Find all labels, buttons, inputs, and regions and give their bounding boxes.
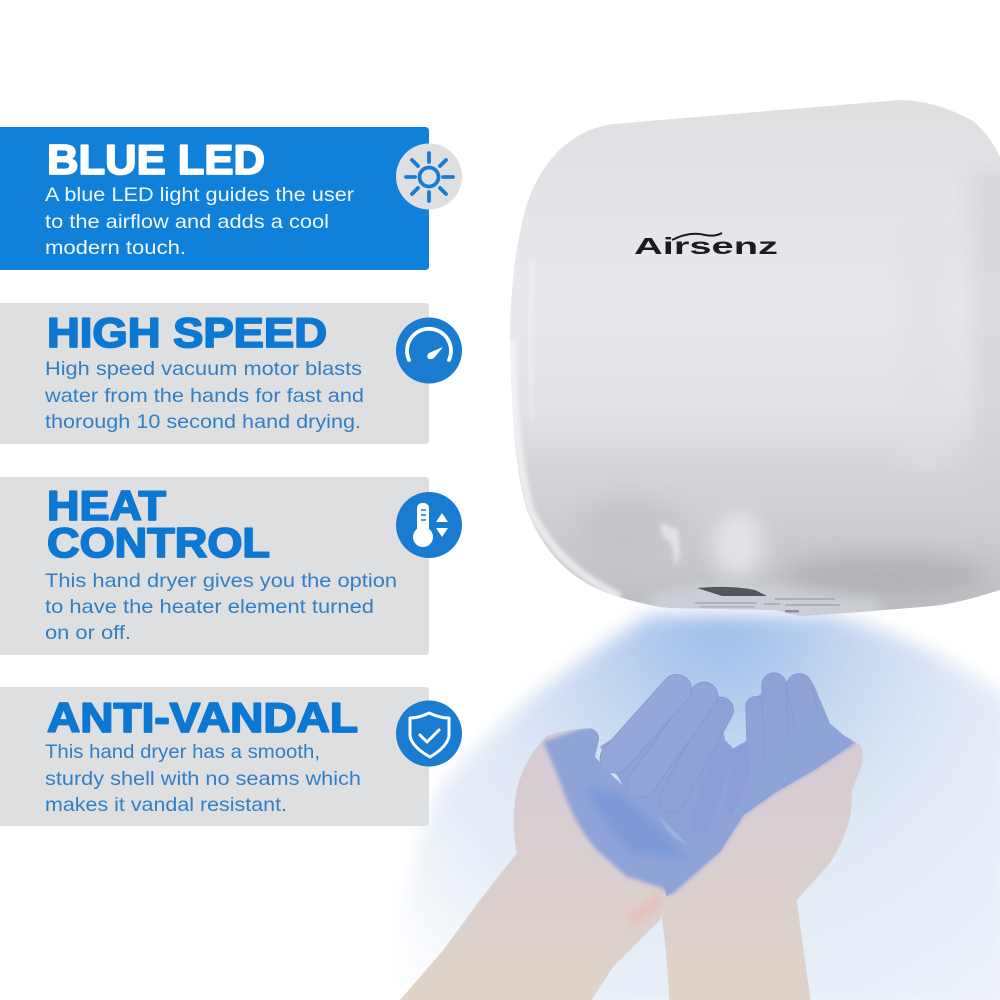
- heading: ANTI-VANDAL: [47, 694, 358, 741]
- description: water from the hands for fast and: [44, 385, 364, 407]
- dryer nozzle: [697, 587, 767, 596]
- description: to have the heater element turned: [45, 596, 374, 618]
- heading: BLUE LED: [47, 136, 265, 183]
- description: A blue LED light guides the user: [45, 184, 355, 206]
- panel background: [0, 477, 429, 655]
- icon: thermometer: [396, 492, 462, 558]
- description: [45, 570, 397, 644]
- panel: blue led: [0, 127, 462, 270]
- panel: high speed: [0, 303, 462, 444]
- panel background: [0, 687, 429, 826]
- panel: heat control: [0, 477, 462, 655]
- description: This hand dryer has a smooth,: [45, 741, 320, 763]
- panel background: [0, 303, 429, 444]
- blue light on palms: [543, 707, 855, 927]
- panel: anti-vandal: [0, 687, 462, 826]
- description: [45, 741, 361, 816]
- heading: [47, 482, 270, 566]
- panel background: [0, 127, 429, 270]
- icon: gauge: [396, 318, 462, 384]
- description: [45, 184, 355, 259]
- description: to the airflow and adds a cool: [45, 211, 329, 233]
- blue airflow glow: [380, 615, 1000, 1000]
- description: sturdy shell with no seams which: [45, 768, 361, 790]
- hand dryer: [510, 100, 1000, 625]
- description: thorough 10 second hand drying.: [45, 411, 361, 433]
- description: on or off.: [45, 622, 131, 644]
- icon: sun: [396, 144, 462, 210]
- description: This hand dryer gives you the option: [45, 570, 397, 592]
- fingers: [600, 680, 853, 897]
- dryer vent holes: [695, 598, 840, 612]
- description: High speed vacuum motor blasts: [45, 358, 362, 380]
- logo: Airsenz: [634, 233, 778, 259]
- description: [44, 358, 364, 433]
- cupped hands: [400, 680, 863, 1000]
- description: makes it vandal resistant.: [45, 794, 287, 816]
- logo: Airsenz: Airsenz: [634, 233, 778, 259]
- heading: CONTROL: [47, 519, 270, 566]
- icon: shield: [396, 700, 462, 766]
- palms and arms: [400, 710, 863, 1000]
- description: modern touch.: [45, 237, 186, 259]
- heading: HEAT: [47, 482, 166, 529]
- dryer shell: [510, 100, 1000, 616]
- heading: HIGH SPEED: [47, 309, 327, 356]
